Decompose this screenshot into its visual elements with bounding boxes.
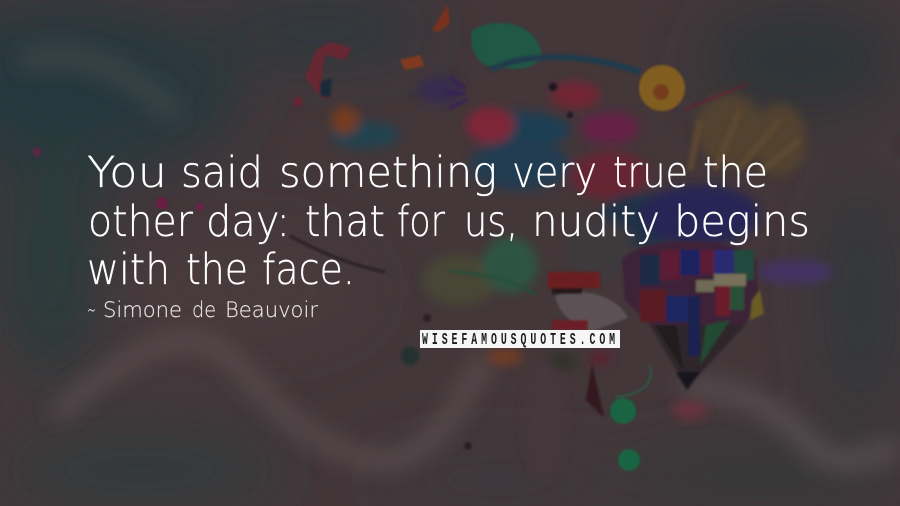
- quote line 2: nudity: [532, 197, 660, 247]
- quote line 1: [87, 148, 768, 198]
- quote line 3: face.: [262, 245, 355, 295]
- quote line 1: true: [613, 148, 688, 198]
- quote line 2: begins: [674, 197, 810, 247]
- splashes and details: [32, 4, 748, 471]
- quote text: [87, 148, 810, 295]
- watermark logo: WISEFAMOUSQUOTES.COM: [422, 331, 619, 350]
- author attribution: Simone: [103, 298, 182, 323]
- hot air balloon: [622, 241, 764, 390]
- quote line 2: [88, 197, 810, 247]
- author attribution: [87, 298, 318, 323]
- quote line 2: other: [88, 197, 193, 247]
- quote line 2: day:: [206, 197, 290, 247]
- orange sunburst rays: [690, 110, 800, 172]
- author attribution: ~: [87, 298, 96, 323]
- quote line 3: the: [186, 245, 248, 295]
- colour masses: [331, 76, 833, 480]
- quote line 1: the: [703, 148, 768, 198]
- quote line 2: for: [397, 197, 445, 247]
- quote line 1: said: [181, 148, 263, 198]
- author attribution: de: [192, 298, 216, 323]
- quote line 2: us,: [464, 197, 518, 247]
- quote line 3: [87, 245, 355, 295]
- quote line 3: with: [87, 245, 170, 295]
- author attribution: Beauvoir: [225, 298, 318, 323]
- pale ribbon: [30, 56, 890, 461]
- quote line 1: You: [87, 148, 167, 198]
- quote line 1: very: [512, 148, 597, 198]
- quote line 2: that: [305, 197, 385, 247]
- quote line 1: something: [279, 148, 497, 198]
